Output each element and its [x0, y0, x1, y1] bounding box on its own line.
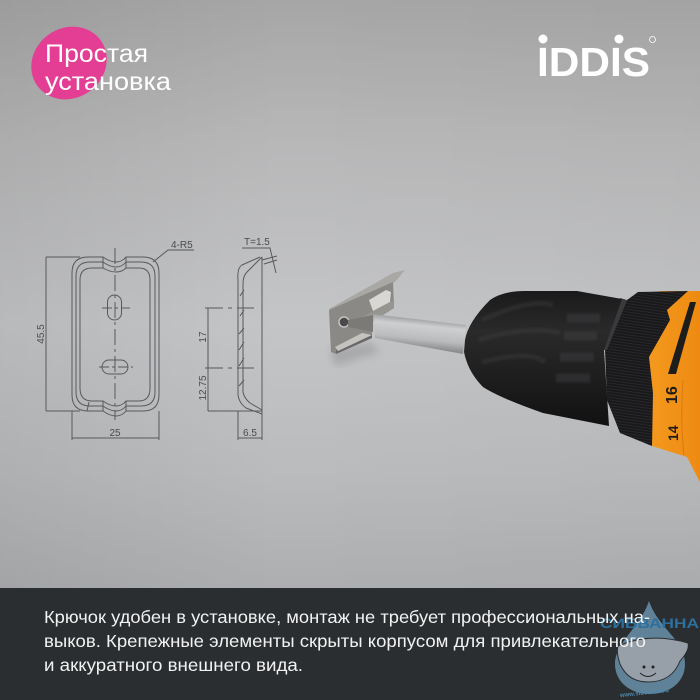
dimension labels: 4-R5: [171, 240, 193, 251]
watermark: СИБВАННА: СИБВАННА: [600, 615, 699, 631]
wall shadow of bracket: [330, 342, 380, 366]
screw: [339, 317, 349, 327]
orange body: [640, 291, 700, 482]
scale numbers: 16: [664, 386, 681, 404]
description text: выков. Крепежные элементы скрыты корпусом для привлекательного: [44, 631, 646, 651]
mounting bracket: [329, 270, 405, 354]
front view of bracket: [72, 248, 159, 420]
heading: [45, 40, 171, 96]
dimension labels: 12.75: [198, 375, 209, 401]
top flange: [329, 270, 405, 313]
plate: [329, 282, 394, 354]
dimension labels: [36, 237, 270, 439]
logo: IDDIS: IDDIS: [537, 39, 650, 85]
drop: [615, 601, 685, 694]
watermark: СИБВАННА: www.sibvanna.ru: [619, 688, 670, 699]
collar: [605, 291, 688, 446]
watermark: СИБВАННА: [600, 601, 699, 699]
dimension labels: T=1.5: [244, 237, 270, 248]
bathtub: [617, 638, 688, 682]
description text: Крючок удобен в установке, монтаж не требует профессиональных на-: [44, 607, 650, 627]
description text: и аккуратного внешнего вида.: [44, 655, 303, 675]
bottom panel: [0, 588, 700, 700]
dimension labels: 45.5: [36, 324, 47, 344]
pink blob: [17, 12, 121, 114]
chuck neck: [600, 298, 627, 350]
dimension labels: 25: [109, 428, 121, 439]
heading: Простая: [45, 40, 148, 68]
dimension lines: [46, 248, 277, 440]
dimension labels: 6.5: [243, 428, 257, 439]
chuck: [464, 291, 622, 426]
scale numbers: [664, 386, 681, 441]
dimension labels: 17: [198, 331, 209, 343]
drill: [373, 291, 700, 482]
scale numbers: 14: [665, 425, 681, 441]
side view of bracket: [205, 257, 262, 414]
bit: [373, 314, 466, 354]
technical drawing: [36, 237, 277, 440]
heading: установка: [45, 68, 171, 96]
description text: [44, 607, 650, 675]
